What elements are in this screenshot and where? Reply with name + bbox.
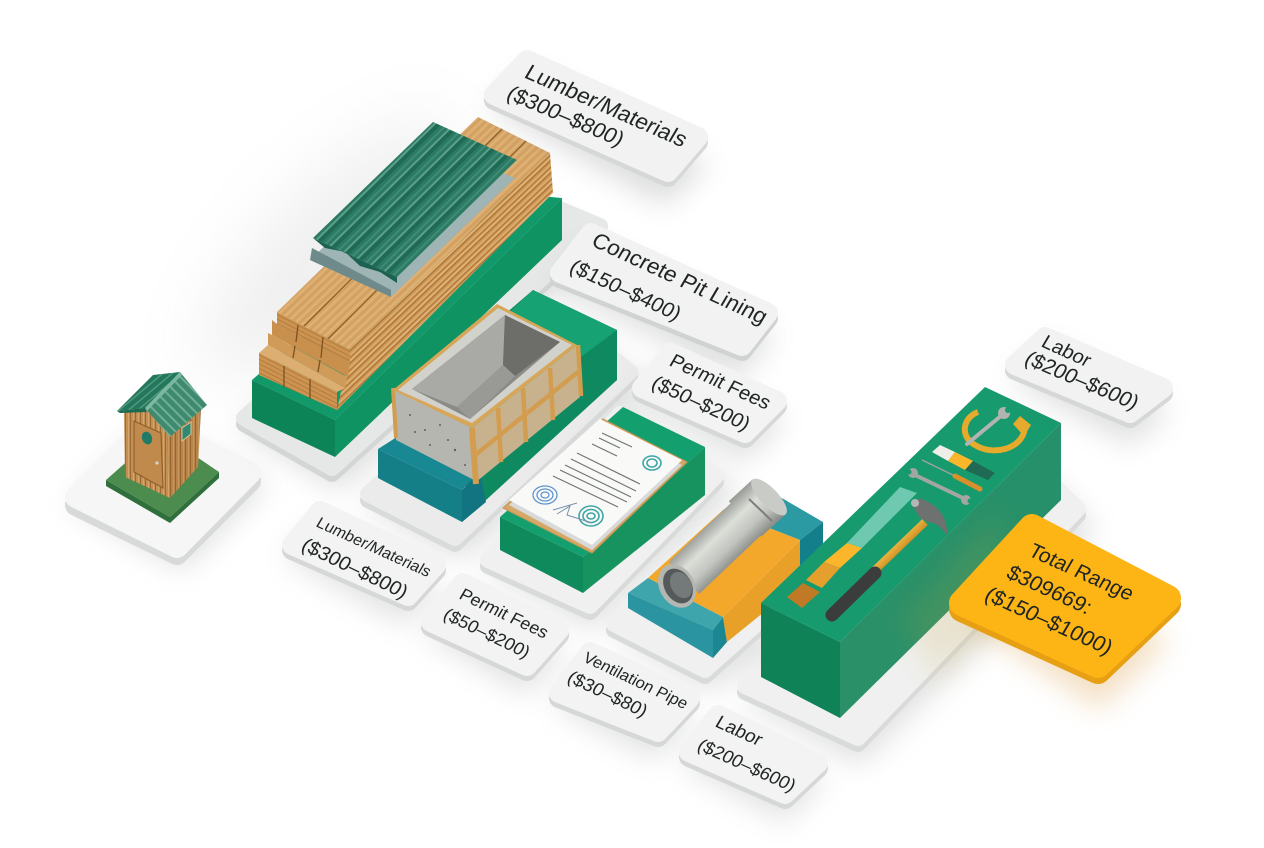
icon: wrench and arrow ring (965, 407, 1031, 450)
colour bars (847, 487, 917, 548)
lumber left end layers (277, 312, 350, 362)
label: concrete pit lining top: Concrete Pit Lining (587, 228, 772, 329)
label: labor top: ($200–$600) (1020, 348, 1143, 414)
concrete teal base (378, 449, 462, 522)
wooden formwork frame (393, 345, 581, 484)
label: lumber bottom: Lumber/Materials (313, 515, 434, 581)
pipe block orange (648, 510, 800, 617)
outhouse roof (117, 372, 180, 411)
concrete pit interior (412, 315, 560, 419)
label: permit fees top: Permit Fees (665, 350, 775, 414)
label: ventilation pipe: Ventilation Pipe (580, 649, 691, 713)
concrete box walls (395, 390, 474, 480)
metal roofing: grey sheet (310, 145, 515, 297)
outhouse grass base (106, 472, 219, 523)
label: lumber bottom: ($300–$800) (297, 535, 412, 603)
panel: labor platform (742, 472, 1095, 765)
label: labor bottom: Labor (712, 711, 767, 750)
colour strip (932, 445, 995, 480)
pipe block teal front (628, 578, 723, 630)
label: labor bottom: ($200–$600) (694, 734, 800, 795)
concrete green base (440, 290, 617, 480)
concrete box rim (393, 304, 577, 428)
panel: pipe platform (612, 544, 790, 692)
label: permit fees bottom: ($50–$200) (440, 604, 534, 662)
panel: lumber platform (240, 184, 600, 490)
ventilation pipe (650, 473, 792, 615)
label: permit fees top (635, 350, 785, 462)
panel: labor block with tools (761, 387, 1061, 718)
label: ventilation pipe (553, 649, 695, 760)
panel: permit block with document (500, 407, 705, 593)
panel: concrete platform (365, 316, 650, 560)
lumber green base (252, 190, 562, 420)
pipe block teal rear (723, 490, 823, 540)
callout: total range: ($150–$1000) (980, 582, 1118, 659)
label: permit fees bottom (425, 583, 565, 695)
panel: ventilation pipe block (628, 473, 823, 658)
icon: hammer (832, 498, 947, 615)
metal roofing: green sheet (313, 122, 517, 277)
label: concrete pit lining top: ($150–$400) (565, 256, 685, 325)
lumber right side (337, 153, 553, 410)
label: labor top (1010, 331, 1170, 445)
outhouse door (134, 421, 163, 488)
clipboard (503, 419, 687, 553)
teal stamps (579, 456, 661, 526)
label: permit fees bottom: Permit Fees (456, 584, 552, 642)
icon: wrench (906, 468, 972, 505)
icon: screwdriver (922, 460, 980, 489)
label: lumber bottom (285, 511, 440, 625)
callout: total range (900, 510, 1170, 710)
label: lumber top (490, 60, 708, 205)
panel: concrete pit block (378, 290, 617, 522)
icon: outhouse (106, 372, 219, 523)
blue stamp (533, 486, 557, 504)
label: permit fees top: ($50–$200) (647, 372, 754, 435)
lumber top planks (277, 117, 550, 350)
callout: total range: $309669: (1002, 561, 1097, 619)
callout: total range: Total Range (1024, 540, 1138, 605)
label: labor top: Labor (1037, 331, 1095, 372)
label: ventilation pipe: ($30–$80) (564, 666, 652, 721)
label: lumber top: Lumber/Materials (520, 60, 692, 152)
panel: lumber block with stacked wood and metal roofing (252, 117, 562, 457)
label: labor bottom (682, 711, 825, 822)
label: lumber top: ($300–$800) (502, 81, 629, 151)
paper with text lines (509, 424, 682, 550)
label: concrete pit lining top (555, 228, 775, 378)
panel: permit platform (485, 410, 740, 630)
panel: outhouse platform (70, 423, 268, 570)
